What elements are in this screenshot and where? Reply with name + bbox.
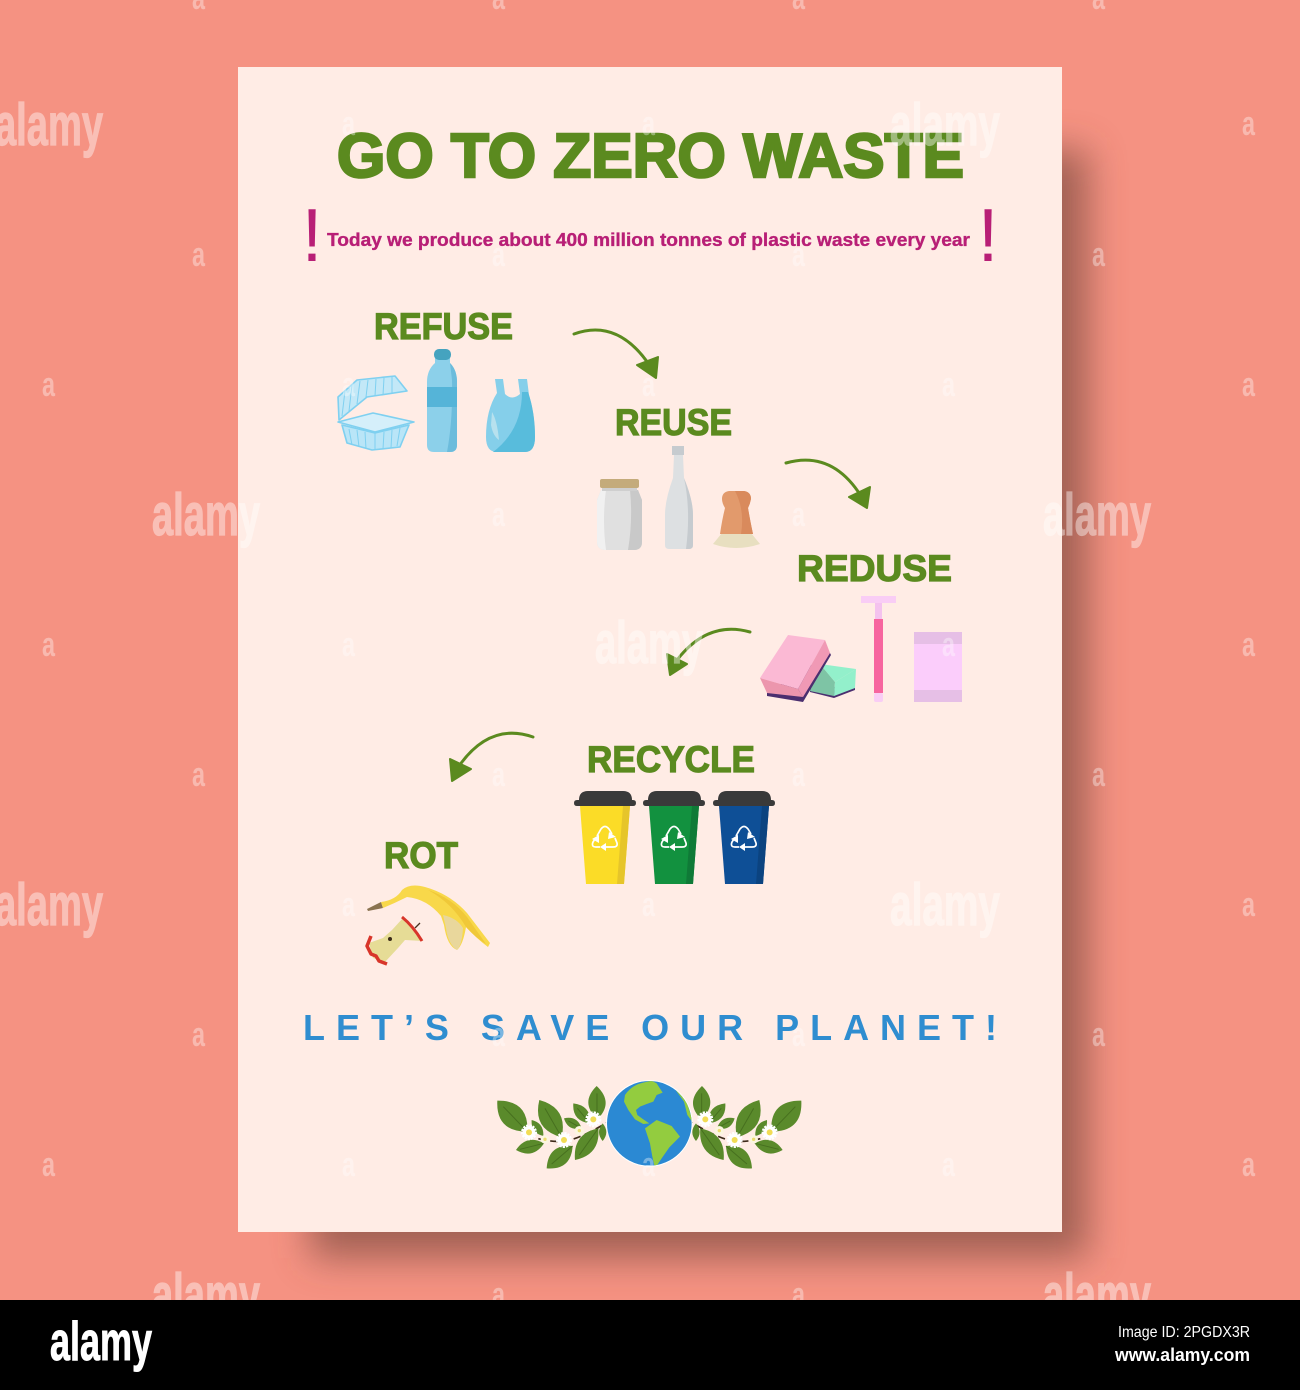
small watermark letters: a <box>492 496 506 534</box>
arrow: refuse to reuse <box>574 330 658 378</box>
right leaves and flowers <box>692 1086 801 1168</box>
large watermark words: alamy <box>1043 1262 1151 1328</box>
small watermark letters: a <box>942 366 956 404</box>
icon: razor <box>861 596 896 702</box>
small watermark letters: a <box>492 236 506 274</box>
small watermark letters: a <box>942 1146 956 1184</box>
small watermark letters: a <box>1242 1146 1256 1184</box>
left leaves and flowers <box>497 1086 607 1168</box>
large watermark words: alamy <box>595 610 703 676</box>
large watermark words: alamy <box>152 1262 260 1328</box>
heading: reuse: REUSE <box>615 402 732 443</box>
step: rot <box>367 835 490 964</box>
small watermark letters: a <box>492 1276 506 1314</box>
small watermark letters: a <box>1242 886 1256 924</box>
small watermark letters: a <box>1092 1016 1106 1054</box>
globe <box>606 1080 693 1168</box>
icon: wooden brush <box>713 491 760 548</box>
slogan: LET’S SAVE OUR PLANET! <box>303 1007 997 1048</box>
large watermark words: alamy <box>0 92 103 158</box>
large watermark words: alamy <box>890 92 1000 158</box>
small watermark letters: a <box>1242 626 1256 664</box>
footer logo: alamy <box>50 1310 152 1372</box>
step: refuse <box>338 306 535 452</box>
step: reduse <box>760 548 962 702</box>
icon: glass jar <box>597 479 642 550</box>
small watermark letters: a <box>642 105 656 143</box>
small watermark letters: a <box>342 626 356 664</box>
small watermark letters: a <box>342 366 356 404</box>
small watermark letters: a <box>342 105 356 143</box>
small watermark letters: a <box>792 236 806 274</box>
small watermark letters: a <box>792 756 806 794</box>
small watermark letters: a <box>342 886 356 924</box>
icon: plastic food container <box>338 376 414 450</box>
small watermark letters: a <box>1242 105 1256 143</box>
arrow: reuse to reduse <box>786 460 870 508</box>
small watermark letters: a <box>492 756 506 794</box>
icon: apple core <box>367 917 423 964</box>
icon: sponges <box>760 635 856 702</box>
arrow: recycle to rot <box>450 733 533 781</box>
image id: Image ID: 2PGDX3R <box>1118 1324 1250 1341</box>
step: recycle <box>574 739 775 884</box>
icon: green bin <box>643 791 705 884</box>
small watermark letters: a <box>492 1016 506 1054</box>
small watermark letters: a <box>342 1146 356 1184</box>
large watermark words: alamy <box>890 872 1000 938</box>
exclamation mark right: ! <box>978 193 998 277</box>
title: GO TO ZERO WASTE <box>337 122 964 191</box>
callout: plastic waste statistic <box>302 193 998 277</box>
icon: banana peel <box>367 886 490 950</box>
small watermark letters: a <box>642 1146 656 1184</box>
poster panel <box>238 67 1062 1232</box>
small watermark letters: a <box>192 756 206 794</box>
large watermark words <box>0 92 1151 1328</box>
large watermark words: alamy <box>0 872 103 938</box>
icon: plastic bottle <box>427 349 457 452</box>
small watermark letters: a <box>792 496 806 534</box>
small watermark letters: a <box>942 626 956 664</box>
icon: package <box>914 632 962 702</box>
small watermark letters: a <box>1092 756 1106 794</box>
icon: plastic bag <box>486 379 535 452</box>
small watermark letters: a <box>1242 366 1256 404</box>
heading: rot: ROT <box>384 835 458 876</box>
small watermark letters: a <box>192 236 206 274</box>
arrow: reduse to recycle <box>667 629 750 675</box>
poster shadow <box>310 150 1088 1258</box>
small watermark letters: a <box>642 886 656 924</box>
small watermark letters: a <box>42 626 56 664</box>
icon: yellow bin <box>574 791 636 884</box>
small watermark letters: a <box>192 1016 206 1054</box>
heading: refuse: REFUSE <box>374 306 513 347</box>
icon: glass bottle <box>665 446 693 549</box>
large watermark words: alamy <box>1043 482 1151 548</box>
website: www.alamy.com <box>1114 1345 1250 1365</box>
icon: earth with leaf wreath <box>497 1080 801 1168</box>
exclamation mark left: ! <box>302 193 322 277</box>
small watermark letters: a <box>792 1016 806 1054</box>
small watermark letters: a <box>42 1146 56 1184</box>
heading: reduse: REDUSE <box>797 548 952 589</box>
icon: blue bin <box>713 791 775 884</box>
small watermark letters: a <box>1092 236 1106 274</box>
small watermark letters: a <box>792 1276 806 1314</box>
small watermark letters: a <box>42 366 56 404</box>
large watermark words: alamy <box>152 482 260 548</box>
footer bar <box>0 1300 1300 1390</box>
heading: recycle: RECYCLE <box>587 739 755 780</box>
step: reuse <box>597 402 760 550</box>
statistic text: Today we produce about 400 million tonnes of plastic waste every year <box>327 230 970 250</box>
small watermark letters: a <box>642 366 656 404</box>
